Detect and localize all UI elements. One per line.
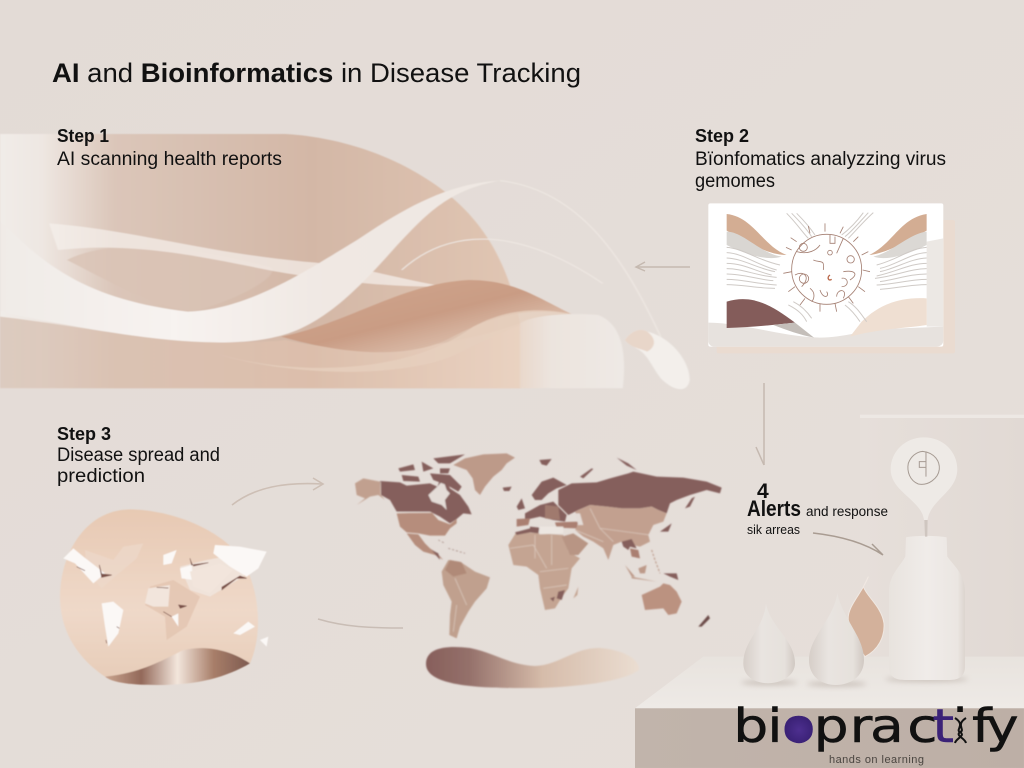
Australia [642,583,682,615]
metallic base [105,648,250,685]
text block: step 1: AI scanning health reports [57,149,282,170]
peach blob [60,509,258,677]
Iceland [503,487,512,491]
text block: step 3 [57,424,220,487]
logo purple o [786,717,812,743]
South America [442,560,490,638]
peach leaf [848,577,884,657]
text block: step 3: prediction [57,466,145,487]
white end shape [520,314,624,388]
text block: step 4 alerts: 4 [757,480,769,503]
dark cracks [77,558,247,643]
curve: map underline [318,619,403,628]
faded continents [145,580,200,640]
text block: step 2: Bïonfomatics analyzzing virus [695,149,946,170]
text block: step 3: Step 3 [57,424,111,444]
lower tan band [0,317,522,388]
text block: step 4 alerts: and response [806,503,888,519]
Russia [558,472,722,515]
logo: biopractify [733,699,1019,766]
Madagascar [573,587,578,598]
Mexico [407,533,443,560]
bottle [889,536,965,680]
card shadow [717,220,955,353]
translucent cross ribbon [49,223,446,287]
logo tagline: hands on learning [829,754,924,766]
middle drop [809,593,864,685]
text block: step 1 [57,126,282,170]
Arctic islands [398,454,465,492]
panel: faded world globe blob [60,509,268,685]
lower swoosh [192,310,571,372]
table top [635,657,1024,708]
virus particle [783,223,870,312]
genome strands, left [727,213,815,322]
genome strands, right [842,213,927,322]
arrow: step 2 to alerts [756,383,764,465]
shaded valley [67,247,272,312]
Asia [575,505,667,560]
text block: step 4 alerts [747,480,888,537]
Vietnam [630,548,640,558]
panel: step 1 flowing ribbon artwork [0,134,690,389]
petal [625,330,690,389]
Caribbean [438,540,465,553]
UK [517,498,525,510]
tan and grey waves, left [727,214,787,255]
Mediterranean [539,527,563,534]
Hudson Bay [428,480,450,510]
arrow: alerts to bottle [813,533,883,555]
thin arc lines [402,181,661,337]
stem [924,518,928,537]
dark tan ribbon [281,280,571,352]
main white ribbon [0,181,500,342]
pin icon [891,437,957,520]
peach hill [850,298,927,337]
Turkey [555,522,578,528]
Scandinavia [532,478,567,500]
text block: step 2 [695,126,946,192]
virus centre mark [828,275,832,280]
large tan circle backdrop [0,134,520,388]
pin symbol [908,451,939,484]
arrow: step 2 to step 1 [636,262,690,271]
heading: title: AI and Bioinformatics in Disease Tracking [52,58,581,88]
left drop [743,603,795,683]
Russian islands [539,458,695,508]
New Zealand [698,615,710,627]
arrow: step 3 to map [232,478,323,505]
borders [510,508,650,588]
text block: step 4 alerts: sik arreas [747,522,800,537]
Caspian [575,513,583,525]
borders [381,482,467,632]
map: Americas [355,453,515,638]
chart: world map [355,453,722,638]
Arabia [562,533,588,555]
Thailand [622,539,637,550]
New Guinea [663,573,678,580]
text block: step 1: Step 1 [57,126,109,146]
back box [860,416,1024,658]
white card [708,203,943,347]
text block: step 4 alerts: Alerts [747,496,801,521]
Alaska [355,478,385,505]
maroon hill [727,299,795,328]
Africa [508,532,580,610]
panel: alert scene [635,415,1024,768]
shape: gradient pool under map [426,647,639,688]
logo wordmark: biopractify [733,699,1019,753]
Europe [525,502,567,522]
text block: step 2: gemomes [695,171,775,192]
contact shadows [741,677,968,687]
Indonesia [625,565,657,582]
map: Eurasia, Africa, Oceania [508,458,722,627]
table front [635,708,1024,768]
USA [397,512,457,536]
panel: step 2 virus genome card [708,203,955,353]
Southern Africa dark [550,590,565,602]
Japan [660,523,672,532]
lower card band [708,323,943,347]
North Africa dark [515,527,539,535]
tan and grey waves, right [869,214,927,255]
Iberia [517,518,530,527]
white fragments [63,545,268,647]
text block: step 3: Disease spread and [57,445,220,466]
right card tint [927,238,943,327]
Greenland [453,453,515,495]
Canada [380,480,472,523]
logo DNA helix [953,716,967,744]
text block: step 2: Step 2 [695,126,749,146]
